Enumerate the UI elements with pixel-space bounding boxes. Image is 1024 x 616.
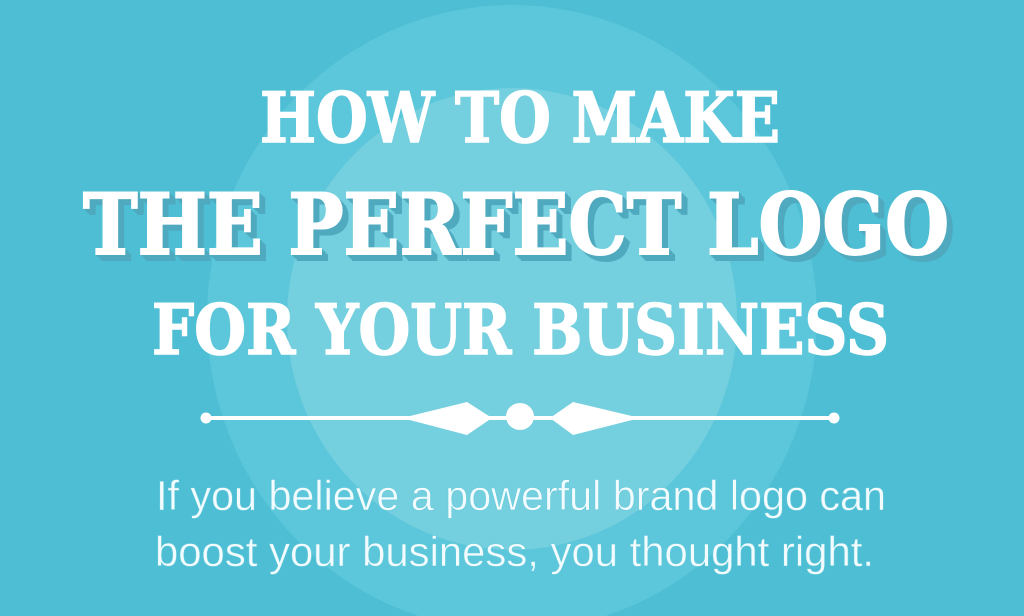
outer circle <box>207 5 817 616</box>
subtitle line 2: boost your business, you thought right. <box>155 528 874 575</box>
title <box>83 78 955 371</box>
divider ornament <box>200 402 840 435</box>
inner circle <box>287 88 737 550</box>
subtitle line 1: If you believe a powerful brand logo can <box>156 472 886 519</box>
subtitle <box>155 472 886 575</box>
title line 1: HOW TO MAKE <box>260 78 780 159</box>
title line 3: FOR YOUR BUSINESS <box>152 290 889 371</box>
